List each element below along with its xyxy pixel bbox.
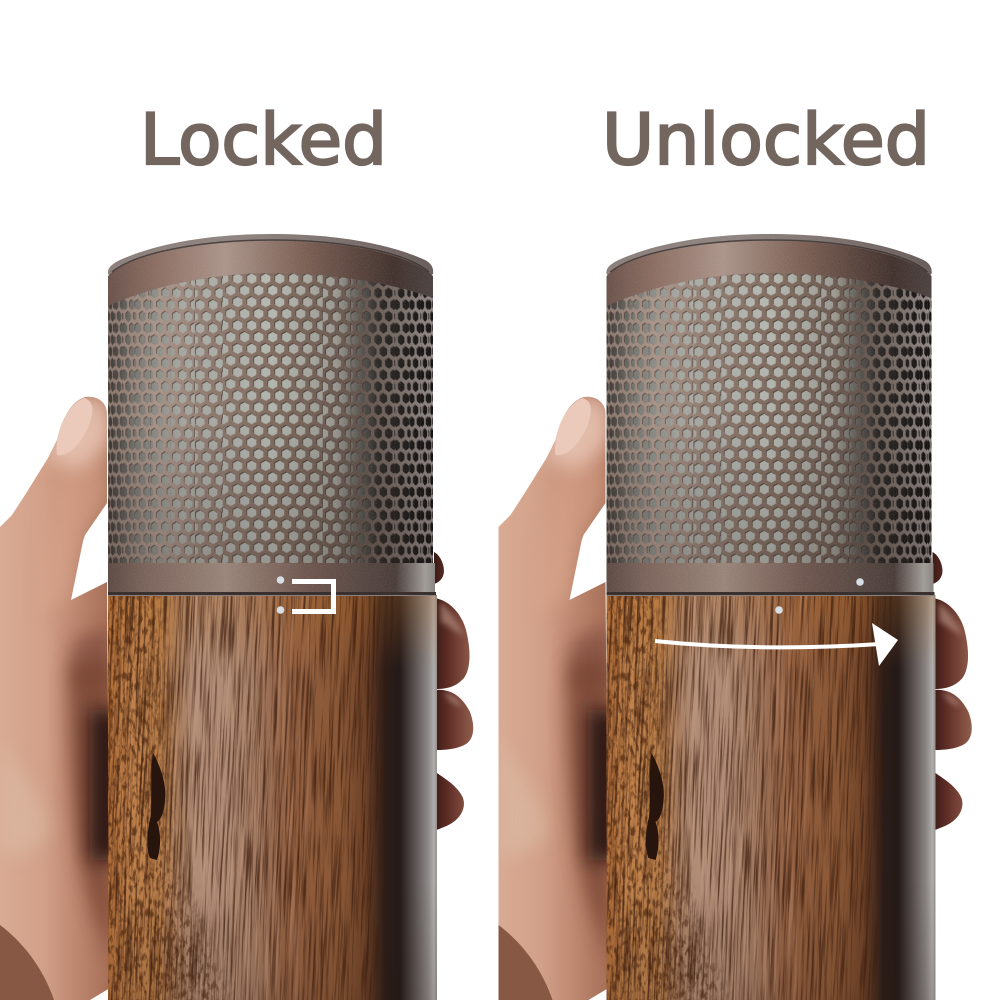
icon: locked bracket [292,582,334,612]
panel: unlocked speaker held in hand [498,234,972,1000]
arrow: twist direction [655,623,898,666]
locked alignment markers [277,576,284,614]
heading: Unlocked: Unlocked [602,99,930,181]
panel: locked speaker held in hand [0,234,473,1000]
unlocked alignment markers [775,578,864,614]
heading: Locked: Locked [140,99,387,181]
